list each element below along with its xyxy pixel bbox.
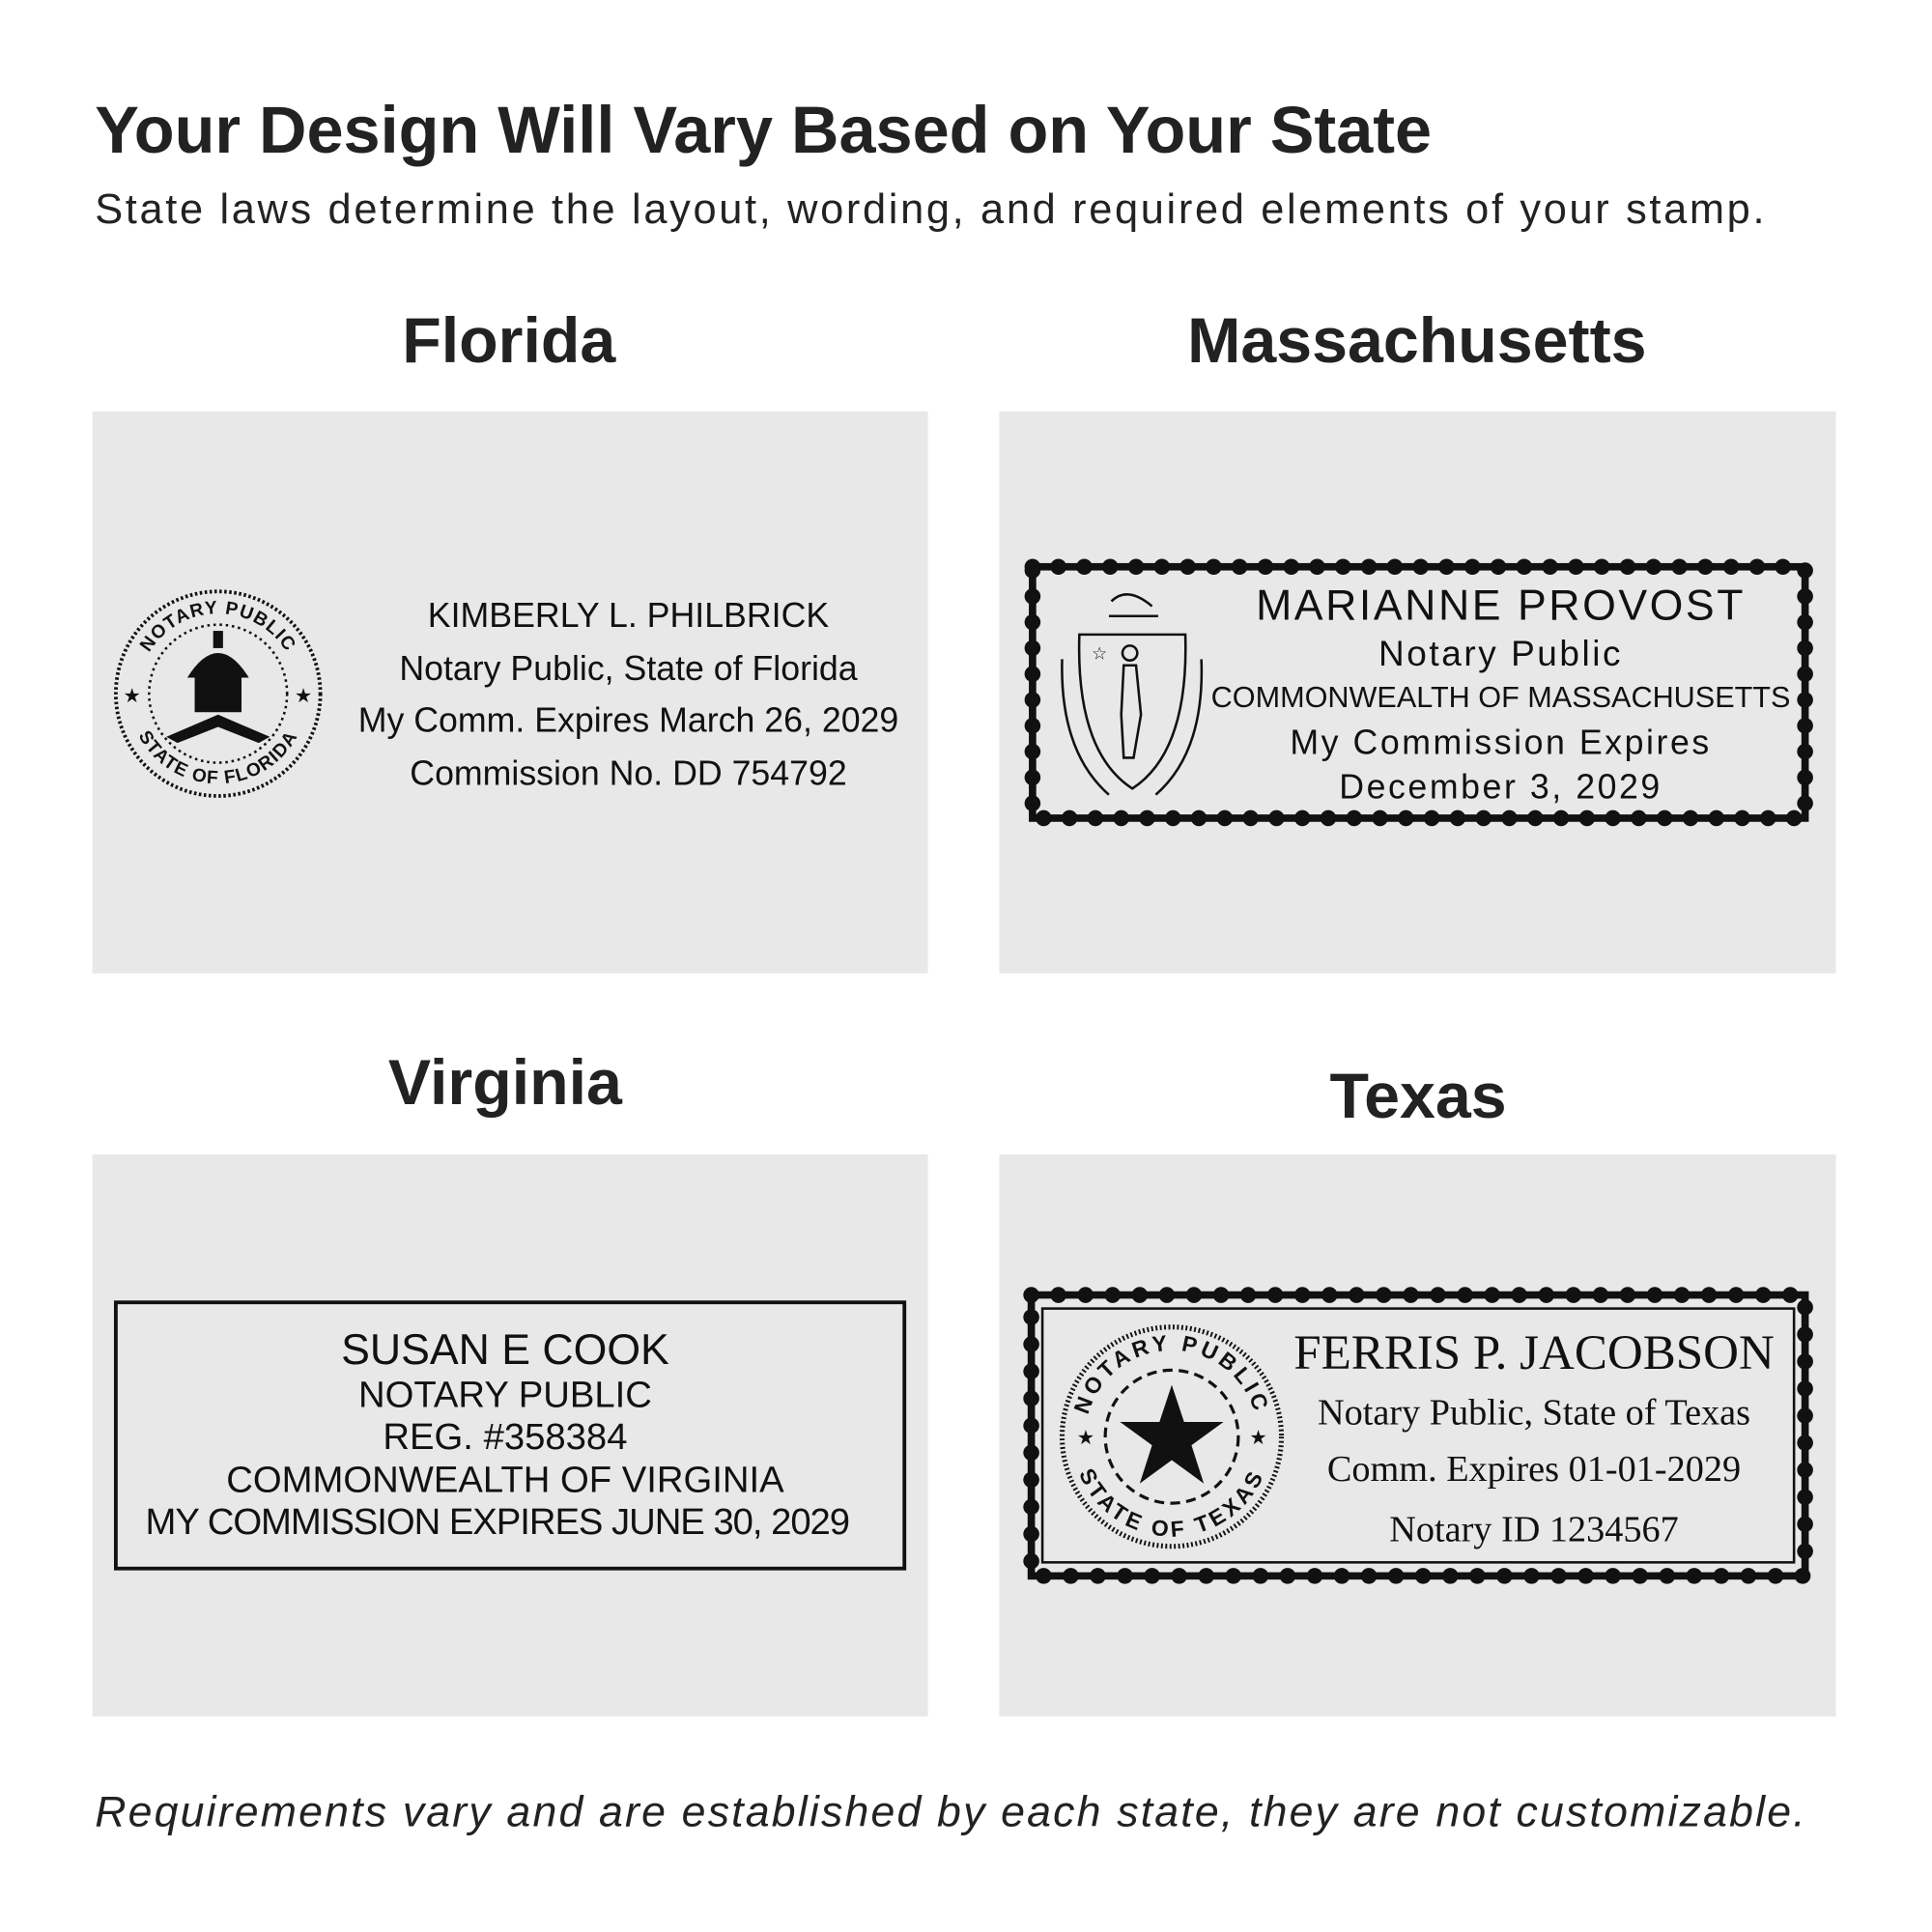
subtitle: State laws determine the layout, wording, and required elements of your stamp. xyxy=(95,186,1765,233)
heading: Virginia: Virginia xyxy=(388,1047,623,1119)
stamp border xyxy=(1033,567,1805,818)
title: Your Design Will Vary Based on Your State xyxy=(95,93,1432,167)
text block: texas stamp: Notary ID 1234567 xyxy=(1389,1510,1679,1550)
icon: florida seal: ★ xyxy=(295,686,312,707)
text block: massachusetts stamp: MARIANNE PROVOST xyxy=(1256,582,1746,630)
text block: massachusetts stamp: December 3, 2029 xyxy=(1339,768,1662,807)
icon: texas seal: STATE OF TEXAS xyxy=(1080,1468,1262,1537)
text block: texas stamp xyxy=(1293,1326,1775,1550)
text block: florida stamp: My Comm. Expires March 26, 2029 xyxy=(358,701,898,740)
icon: massachusetts shield: ☆ xyxy=(1092,643,1107,663)
icon: florida seal: ★ xyxy=(124,686,141,707)
panel: virginia xyxy=(93,1154,927,1717)
icon: florida seal: NOTARY PUBLIC xyxy=(139,601,296,652)
text block: texas stamp: Comm. Expires 01-01-2029 xyxy=(1327,1449,1741,1490)
text block: massachusetts stamp: My Commission Expires xyxy=(1290,724,1712,762)
panel: florida xyxy=(93,412,927,974)
text block: florida stamp: Commission No. DD 754792 xyxy=(410,753,847,792)
text block: virginia stamp xyxy=(146,1326,850,1543)
text block: virginia stamp: SUSAN E COOK xyxy=(341,1326,669,1374)
text block: texas stamp: FERRIS P. JACOBSON xyxy=(1293,1326,1775,1380)
text block: florida stamp: Notary Public, State of Florida xyxy=(399,649,858,688)
heading: Massachusetts: Massachusetts xyxy=(1187,305,1647,377)
icon: florida seal xyxy=(114,589,323,798)
text block: virginia stamp: MY COMMISSION EXPIRES JUNE 30, 2029 xyxy=(146,1501,850,1543)
stamp border xyxy=(1032,1295,1805,1576)
text block: massachusetts stamp: COMMONWEALTH OF MASSACHUSETTS xyxy=(1211,681,1790,714)
icon: florida seal: STATE OF FLORIDA xyxy=(139,730,298,783)
panel: massachusetts xyxy=(999,412,1836,974)
text block: virginia stamp: NOTARY PUBLIC xyxy=(358,1375,652,1416)
icon: texas seal xyxy=(1059,1324,1285,1549)
text block: virginia stamp: COMMONWEALTH OF VIRGINIA xyxy=(226,1460,784,1501)
panel: texas xyxy=(999,1154,1835,1717)
icon: texas seal: NOTARY PUBLIC xyxy=(1074,1335,1267,1414)
text block: virginia stamp: REG. #358384 xyxy=(383,1416,627,1458)
icon: massachusetts shield xyxy=(1062,594,1202,795)
text block: massachusetts stamp: Notary Public xyxy=(1378,634,1623,673)
text block: texas stamp: Notary Public, State of Texas xyxy=(1318,1392,1750,1433)
text block: florida stamp xyxy=(358,596,898,792)
heading: Texas: Texas xyxy=(1330,1061,1507,1132)
icon: texas seal: ★ xyxy=(1077,1428,1094,1449)
text block: florida stamp: KIMBERLY L. PHILBRICK xyxy=(428,596,829,635)
icon: texas seal: ★ xyxy=(1249,1428,1267,1449)
text block: massachusetts stamp xyxy=(1211,582,1790,807)
footer note: Requirements vary and are established by each state, they are not customizable. xyxy=(95,1788,1805,1835)
heading: Florida: Florida xyxy=(402,305,616,377)
